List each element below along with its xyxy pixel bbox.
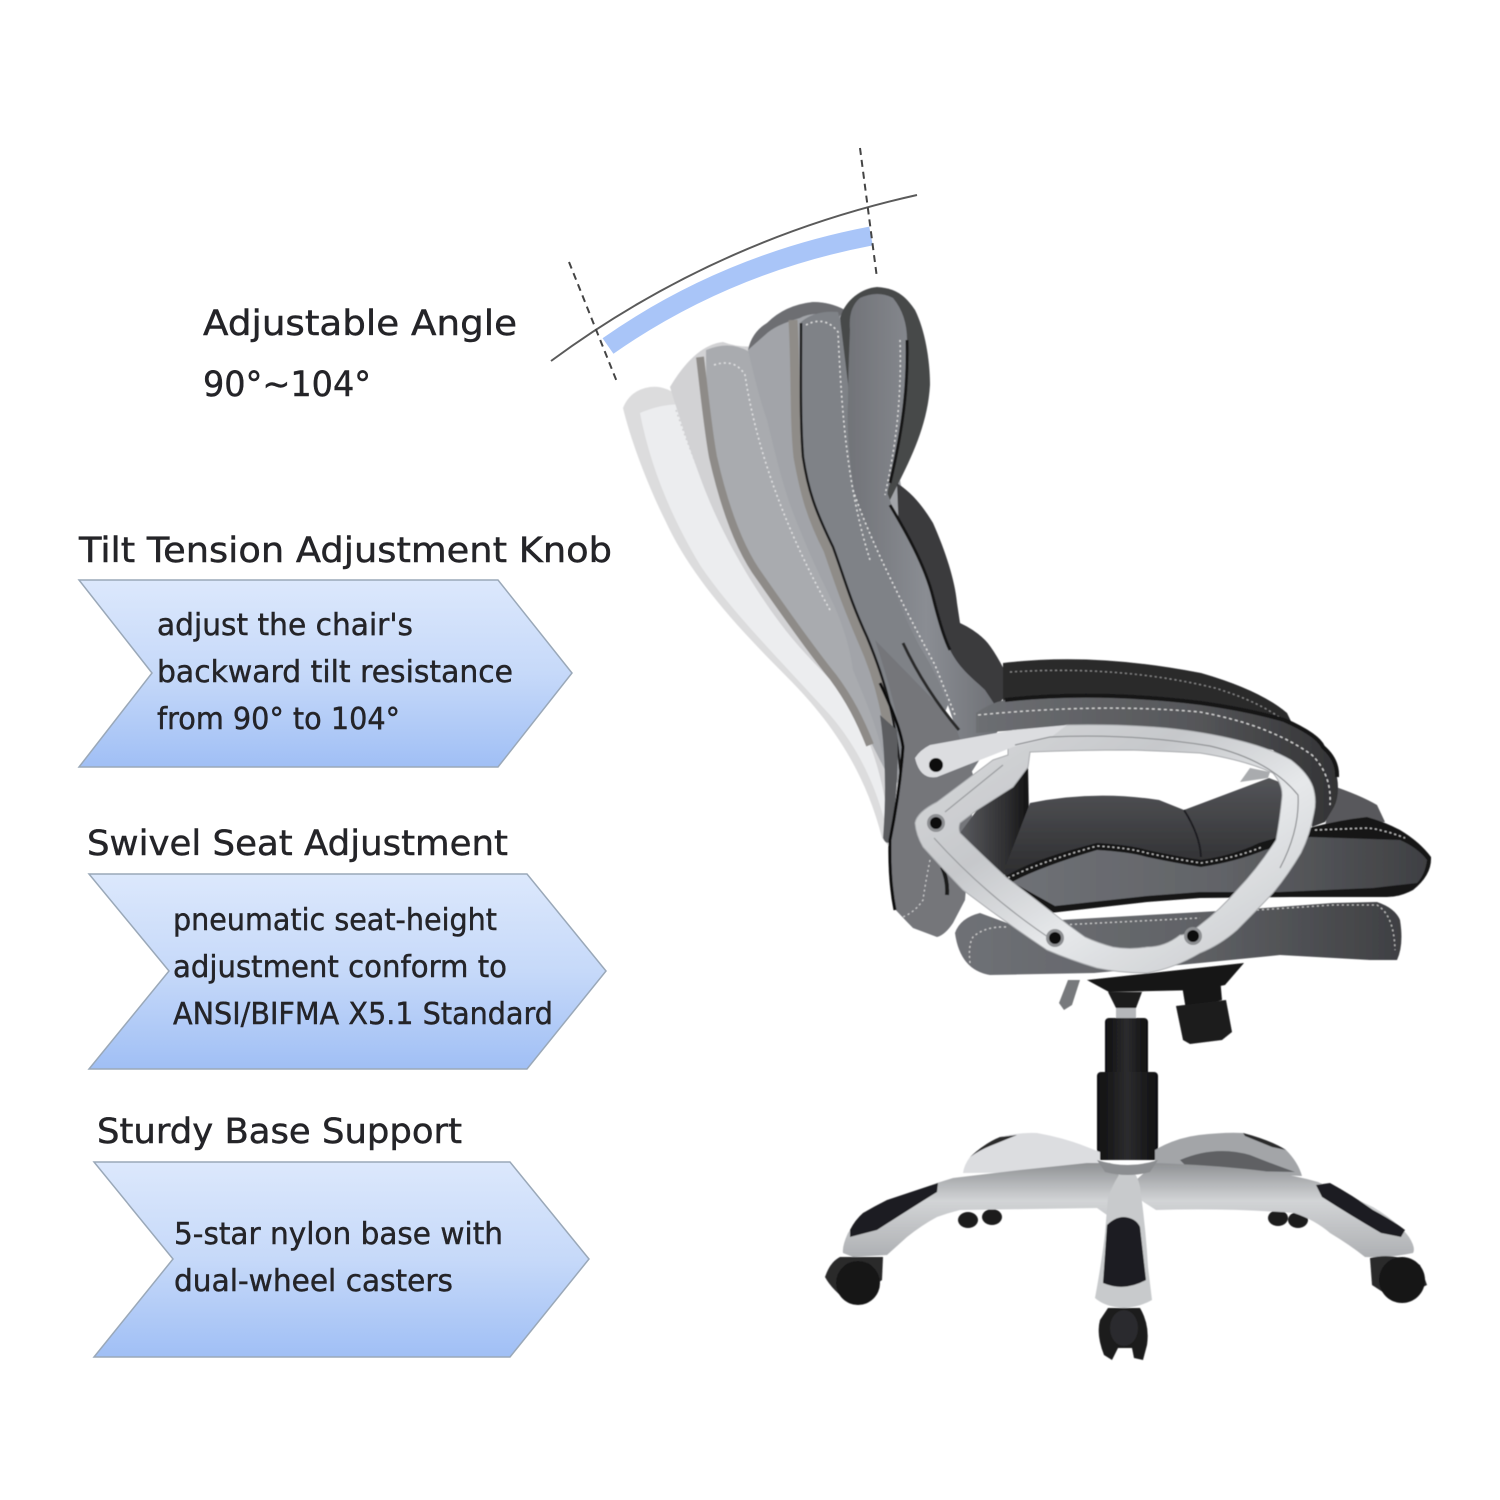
blue angle band [608,236,871,346]
panel: swivel seat arrow: ANSI/BIFMA X5.1 Standard [173,997,553,1032]
caster: left [825,1257,883,1305]
heading: tilt tension: Tilt Tension Adjustment Knob [78,531,612,571]
ghost back: second tilt position [670,340,950,800]
near armrest pad [976,696,1338,827]
hub ring [1097,1160,1158,1175]
ghost back: lightest tilt position [623,387,960,860]
far arm frame piece [1240,768,1270,782]
far armrest [1003,659,1300,740]
rear back pad [897,483,1013,720]
tension knob [1176,1000,1232,1044]
rear small casters [958,1209,1308,1228]
panel: tilt tension arrow: backward tilt resistance [157,655,513,690]
silver arm frame [915,725,1315,973]
left base leg [843,1163,1130,1257]
caster: front [1099,1308,1148,1360]
right base leg [1125,1163,1414,1257]
seat top cushion [1005,778,1300,880]
panel: swivel seat arrow: pneumatic seat-height [173,903,497,938]
rear base legs [963,1133,1302,1176]
gas lift column [1097,992,1158,1160]
bolts [927,758,1202,947]
angle indicator [551,148,917,382]
chair illustration [623,287,1431,1360]
ghost back: third tilt position [748,302,960,843]
panel: sturdy base arrow [94,1162,589,1357]
mechanism and knob [1059,963,1244,1044]
heading: swivel seat: Swivel Seat Adjustment [87,824,508,864]
heading: adjustable angle: Adjustable Angle [203,304,517,344]
rear headrest pad [840,287,930,500]
caster: right [1370,1256,1427,1303]
heading: adjustable angle [203,304,517,405]
panel: sturdy base arrow: dual-wheel casters [174,1264,453,1299]
base grip inserts [850,1183,1405,1287]
panel: sturdy base arrow: 5-star nylon base with [174,1217,503,1252]
panel: swivel seat arrow [89,874,606,1069]
far seat top [1325,785,1385,830]
heading: adjustable angle: 90°~104° [203,365,371,405]
heading: sturdy base: Sturdy Base Support [97,1112,462,1152]
panel: tilt tension arrow: from 90° to 104° [157,702,400,737]
tilt lever [1059,980,1080,1010]
lower seat cushion [955,902,1401,975]
lower backrest [875,640,975,937]
seat front side [1005,817,1431,913]
arm tip [915,725,1067,777]
arc line [551,195,917,361]
tension knob stem [1180,966,1222,1010]
panel: swivel seat arrow: adjustment conform to [173,950,507,985]
front base leg [1095,1165,1152,1308]
inner back strip [960,765,1030,876]
dashed limit left [569,262,617,382]
dashed limit right [860,148,877,278]
panel: tilt tension arrow: adjust the chair's [157,608,413,643]
panel: tilt tension arrow [79,580,572,767]
main backrest face [848,294,1005,790]
